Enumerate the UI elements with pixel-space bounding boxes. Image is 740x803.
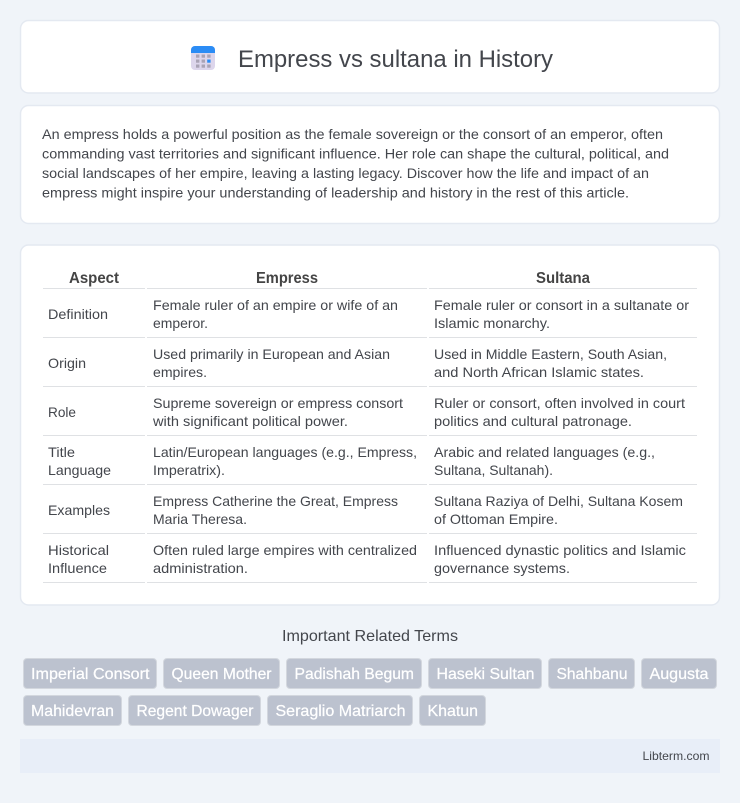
text block: introduction paragraph: social landscapes of her empire, leaving a lasting legacy. Discover how the life and impact of an — [42, 165, 649, 181]
row: examples: Maria Theresa. — [153, 511, 247, 527]
row: definition: Islamic monarchy. — [434, 315, 550, 331]
table header: Aspect — [69, 270, 120, 287]
row: role: with significant political power. — [152, 413, 348, 429]
row: role: Supreme sovereign or empress consort — [153, 395, 403, 411]
row: examples: Sultana Raziya of Delhi, Sultana Kosem — [434, 493, 683, 509]
row: title language: Imperatrix). — [153, 462, 225, 478]
heading: related terms: Important Related Terms — [282, 628, 458, 645]
row: examples: of Ottoman Empire. — [434, 511, 558, 527]
text block: introduction paragraph: empress might inspire your understanding of leadership and history in the rest of this article. — [42, 184, 629, 200]
related term tags: Augusta — [650, 666, 709, 683]
row: title language: Title — [48, 444, 75, 460]
row: origin — [48, 346, 667, 380]
related term tags: Seraglio Matriarch — [276, 703, 406, 720]
row: title language: Sultana, Sultanah). — [434, 462, 553, 478]
row: origin: Used primarily in European and Asian — [153, 346, 390, 362]
row: origin: empires. — [153, 364, 207, 380]
related term tags: Haseki Sultan — [436, 666, 534, 683]
related term tags — [24, 658, 716, 726]
row: definition: Female ruler of an empire or wife of an — [153, 297, 398, 313]
row: title language — [48, 444, 655, 478]
text block: introduction paragraph — [42, 126, 669, 200]
panel: comparison table — [20, 245, 720, 605]
row: definition: emperor. — [153, 315, 208, 331]
panel: introduction — [20, 106, 720, 224]
row: historical influence: Historical — [48, 542, 109, 558]
row: historical influence: Influence — [48, 560, 107, 576]
related term tags: Padishah Begum — [294, 666, 414, 683]
table header — [69, 270, 590, 287]
footer credit: Libterm.com — [642, 749, 710, 763]
row: examples: Empress Catherine the Great, Empress — [153, 493, 398, 509]
table header: Sultana — [536, 270, 590, 287]
row: historical influence: administration. — [153, 560, 248, 576]
row: definition: Female ruler or consort in a sultanate or — [434, 297, 689, 313]
footer — [20, 739, 720, 773]
row: title language: Arabic and related languages (e.g., — [434, 444, 655, 460]
row: historical influence — [48, 542, 686, 576]
row: historical influence: Influenced dynastic politics and Islamic — [434, 542, 686, 558]
icon: calendar — [191, 46, 215, 70]
row: definition: Definition — [48, 306, 108, 322]
row: examples — [48, 493, 683, 527]
row: origin: Origin — [48, 355, 86, 371]
text block: introduction paragraph: commanding vast territories and significant influence. Her role can shape the cultural, political, and — [42, 146, 669, 162]
title: Empress vs sultana in History — [238, 46, 553, 73]
table header: Empress — [256, 270, 318, 287]
text block: introduction paragraph: An empress holds a powerful position as the female sovereign or the consort of an emperor, often — [42, 126, 663, 142]
row: historical influence: governance systems. — [434, 560, 570, 576]
panel: header — [20, 20, 720, 93]
related term tags: Regent Dowager — [136, 703, 254, 720]
row: role: Role — [48, 404, 76, 420]
row: origin: Used in Middle Eastern, South Asian, — [434, 346, 667, 362]
related term tags: Mahidevran — [31, 703, 114, 720]
row: title language: Latin/European languages (e.g., Empress, — [153, 444, 417, 460]
row: definition — [48, 297, 689, 331]
row: origin: and North African Islamic states. — [434, 364, 644, 380]
row: role: Ruler or consort, often involved in court — [434, 395, 685, 411]
related term tags: Khatun — [428, 703, 478, 720]
related term tags: Imperial Consort — [31, 666, 150, 683]
related term tags: Shahbanu — [556, 666, 628, 683]
row: role — [48, 395, 685, 429]
row: historical influence: Often ruled large empires with centralized — [153, 542, 417, 558]
row: examples: Examples — [48, 502, 110, 518]
row: role: politics and cultural patronage. — [434, 413, 632, 429]
related term tags: Queen Mother — [172, 666, 272, 683]
row: title language: Language — [48, 462, 111, 478]
